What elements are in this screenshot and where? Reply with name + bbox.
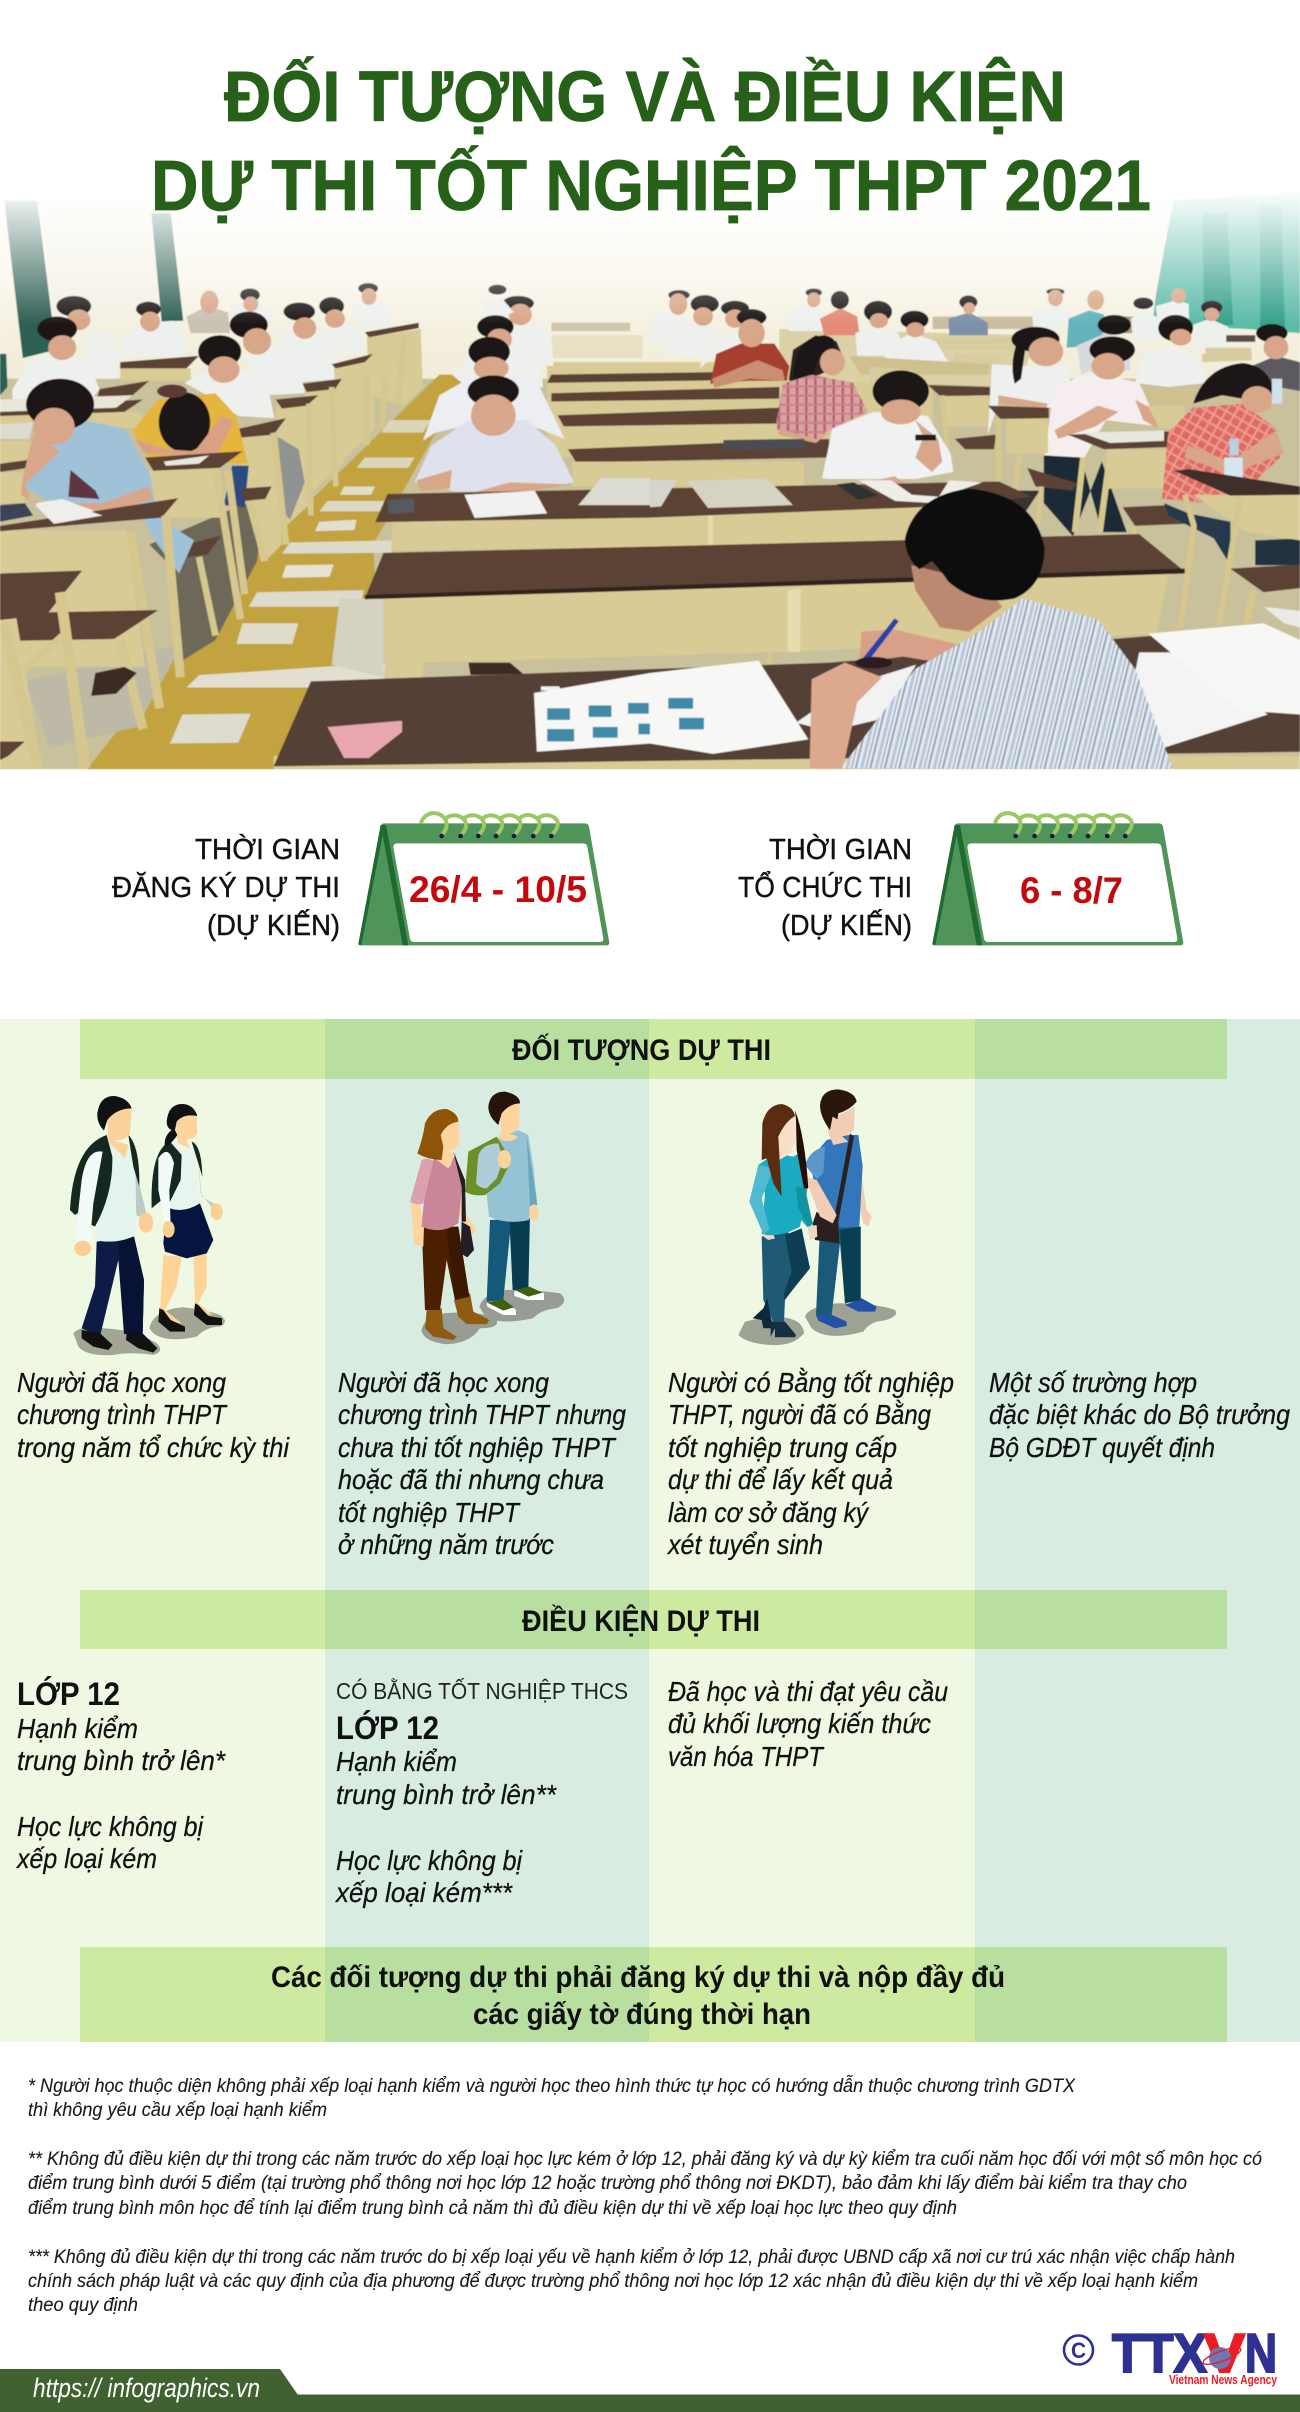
footnote 2 xyxy=(28,2148,1262,2219)
callout: registration requirement: Các đối tượng dự thi phải đăng ký dự thi và nộp đầy đủ xyxy=(271,1961,1005,1994)
text: column 3 candidates xyxy=(666,1367,954,1560)
student boy behind yellow xyxy=(184,335,305,520)
text: column 3 candidates: làm cơ sở đăng ký xyxy=(668,1497,870,1528)
desk under yellow student xyxy=(145,451,272,636)
desk front left xyxy=(0,498,180,708)
student yellow xyxy=(133,385,249,507)
icon: calendar registration dates: 26/4 - 10/5 xyxy=(409,869,587,910)
title xyxy=(151,57,1151,226)
text: condition column 2: Hạnh kiểm xyxy=(336,1746,457,1777)
text: column 3 candidates: dự thi để lấy kết quả xyxy=(668,1464,893,1495)
text: column 2 candidates: Người đã học xong xyxy=(338,1367,549,1398)
text: condition column 2 xyxy=(334,1677,628,1908)
text: column 1 candidates: trong năm tổ chức kỳ thi xyxy=(17,1432,290,1463)
footnote 2: điểm trung bình môn học để tính lại điểm trung bình cả năm thì đủ điều kiện dự thi về xếp loại học lực theo quy định xyxy=(28,2197,957,2219)
text: column 2 candidates: ở những năm trước xyxy=(338,1529,554,1560)
footnote 3: chính sách pháp luật và các quy định của địa phương để được trường phổ thông nơi học lớp 12 xác nhận đủ điều kiện dự thi về xếp loại hạnh kiểm xyxy=(28,2270,1198,2292)
text: condition column 2: trung bình trở lên** xyxy=(336,1779,557,1810)
registration period label: ĐĂNG KÝ DỰ THI xyxy=(112,871,340,904)
text: column 1 candidates xyxy=(17,1367,290,1463)
window and curtain left xyxy=(0,200,183,395)
text: condition column 1: LỚP 12 xyxy=(17,1676,120,1712)
examiner from behind xyxy=(810,489,1173,769)
text: condition column 3 xyxy=(668,1676,948,1772)
heading: đối tượng dự thi xyxy=(80,1019,1227,1079)
text: condition column 1: xếp loại kém xyxy=(15,1843,157,1874)
heading: điều kiện dự thi xyxy=(80,1590,1227,1649)
right students mid xyxy=(988,327,1159,536)
student red check xyxy=(1162,363,1300,565)
footnote 3: theo quy định xyxy=(28,2294,138,2316)
floor aisle xyxy=(25,375,468,769)
title: DỰ THI TỐT NGHIỆP THPT 2021 xyxy=(151,146,1151,226)
desks around yellow student xyxy=(236,418,286,561)
text: column 2 candidates: chưa thi tốt nghiệp THPT xyxy=(338,1432,617,1463)
footnote 1 xyxy=(28,2074,1076,2121)
text: condition column 1: trung bình trở lên* xyxy=(17,1745,226,1776)
text: column 3 candidates: xét tuyển sinh xyxy=(666,1529,823,1560)
top fade xyxy=(0,130,1300,325)
center rows far xyxy=(547,323,1036,487)
text: condition column 2: Học lực không bị xyxy=(336,1845,523,1876)
right side desks xyxy=(955,406,1185,540)
text: column 4 candidates: Bộ GDĐT quyết định xyxy=(989,1432,1215,1463)
logo: TTXVN: V xyxy=(1204,2322,1245,2384)
text: condition column 1: Học lực không bị xyxy=(17,1811,204,1842)
far center and right students xyxy=(787,288,1300,406)
icon: calendar exam dates: 6 - 8/7 xyxy=(1020,870,1123,911)
icon: calendar registration dates xyxy=(358,813,609,945)
desk row with calculators xyxy=(375,439,1032,551)
exam period label: THỜI GIAN xyxy=(769,833,912,866)
text: column 4 candidates xyxy=(989,1367,1290,1463)
text: column 1 candidates: chương trình THPT xyxy=(17,1399,228,1430)
registration period label xyxy=(112,833,340,942)
text: column 3 candidates: THPT, người đã có Bằng xyxy=(668,1399,931,1430)
text: condition column 2: LỚP 12 xyxy=(336,1710,439,1746)
far left and far center students xyxy=(12,283,392,399)
column background bands xyxy=(0,1019,1300,2042)
registration period label: (DỰ KIẾN) xyxy=(207,908,340,942)
text: column 3 candidates: Người có Bằng tốt nghiệp xyxy=(668,1367,954,1398)
left back desks xyxy=(0,323,423,528)
icon: calendar exam dates xyxy=(932,813,1183,945)
text: condition column 3: đủ khối lượng kiến thức xyxy=(668,1708,931,1739)
desk row big front xyxy=(365,534,1185,678)
text: condition column 1 xyxy=(15,1676,226,1874)
illustration: older pair xyxy=(738,1089,896,1345)
center left column students xyxy=(415,285,574,499)
center mid students xyxy=(650,290,990,491)
registration period label: THỜI GIAN xyxy=(195,833,340,866)
text: condition column 1: Hạnh kiểm xyxy=(17,1713,138,1744)
right front desk xyxy=(1174,469,1300,627)
footer bar with url: https:// infographics.vn xyxy=(33,2373,260,2403)
benches and front left desk xyxy=(0,571,158,768)
title: ĐỐI TƯỢNG VÀ ĐIỀU KIỆN xyxy=(224,57,1066,137)
footnote 3 xyxy=(28,2246,1235,2316)
illustration: student pair in uniform xyxy=(70,1096,225,1355)
callout: registration requirement: các giấy tờ đúng thời hạn xyxy=(473,1998,811,2031)
footnote 1: thì không yêu cầu xếp loại hạnh kiểm xyxy=(28,2099,327,2121)
heading: đối tượng dự thi: ĐỐI TƯỢNG DỰ THI xyxy=(512,1033,771,1067)
photo: exam room xyxy=(0,130,1300,769)
logo: TTXVN xyxy=(1064,2322,1278,2387)
exam period label: TỔ CHỨC THI xyxy=(738,870,912,904)
text: condition column 2: CÓ BẰNG TỐT NGHIỆP THCS xyxy=(336,1677,628,1704)
illustration: casual pair with backpack xyxy=(410,1092,564,1344)
logo: TTXVN: N xyxy=(1245,2322,1277,2384)
exam period label: (DỰ KIẾN) xyxy=(781,908,912,942)
front desk with papers xyxy=(274,623,1300,769)
far right rows xyxy=(933,317,1252,404)
text: column 2 candidates xyxy=(338,1367,626,1560)
text: condition column 2: xếp loại kém*** xyxy=(334,1877,513,1908)
heading: điều kiện dự thi: ĐIỀU KIỆN DỰ THI xyxy=(522,1604,760,1638)
footnote 1: * Người học thuộc diện không phải xếp loại hạnh kiểm và người học theo hình thức tự học có hướng dẫn thuộc chương trình GDTX xyxy=(28,2074,1076,2097)
white shirt girl xyxy=(822,412,953,479)
text: column 4 candidates: Một số trường hợp xyxy=(989,1367,1197,1398)
text: condition column 3: văn hóa THPT xyxy=(668,1741,825,1772)
text: column 2 candidates: chương trình THPT nhưng xyxy=(338,1399,626,1430)
curtain right xyxy=(1152,192,1300,333)
text: column 2 candidates: hoặc đã thi nhưng chưa xyxy=(338,1464,604,1495)
footer bar with url xyxy=(0,2369,1300,2412)
text: column 1 candidates: Người đã học xong xyxy=(17,1367,226,1398)
text: condition column 3: Đã học và thi đạt yêu cầu xyxy=(668,1676,948,1707)
text: column 2 candidates: tốt nghiệp THPT xyxy=(338,1497,521,1528)
text: column 3 candidates: tốt nghiệp trung cấp xyxy=(668,1432,897,1463)
callout: registration requirement xyxy=(80,1947,1227,2042)
logo: TTXVN: C xyxy=(1071,2338,1086,2363)
footnote 2: điểm trung bình dưới 5 điểm (tại trường phổ thông nơi học lớp 12 hoặc trường phổ thông nơi ĐKDT), bảo đảm khi lấy điểm bài kiểm tra thay cho xyxy=(28,2172,1187,2194)
student blue shirt xyxy=(21,379,194,574)
exam period label xyxy=(738,833,912,942)
logo: TTXVN: TTX xyxy=(1112,2322,1207,2384)
